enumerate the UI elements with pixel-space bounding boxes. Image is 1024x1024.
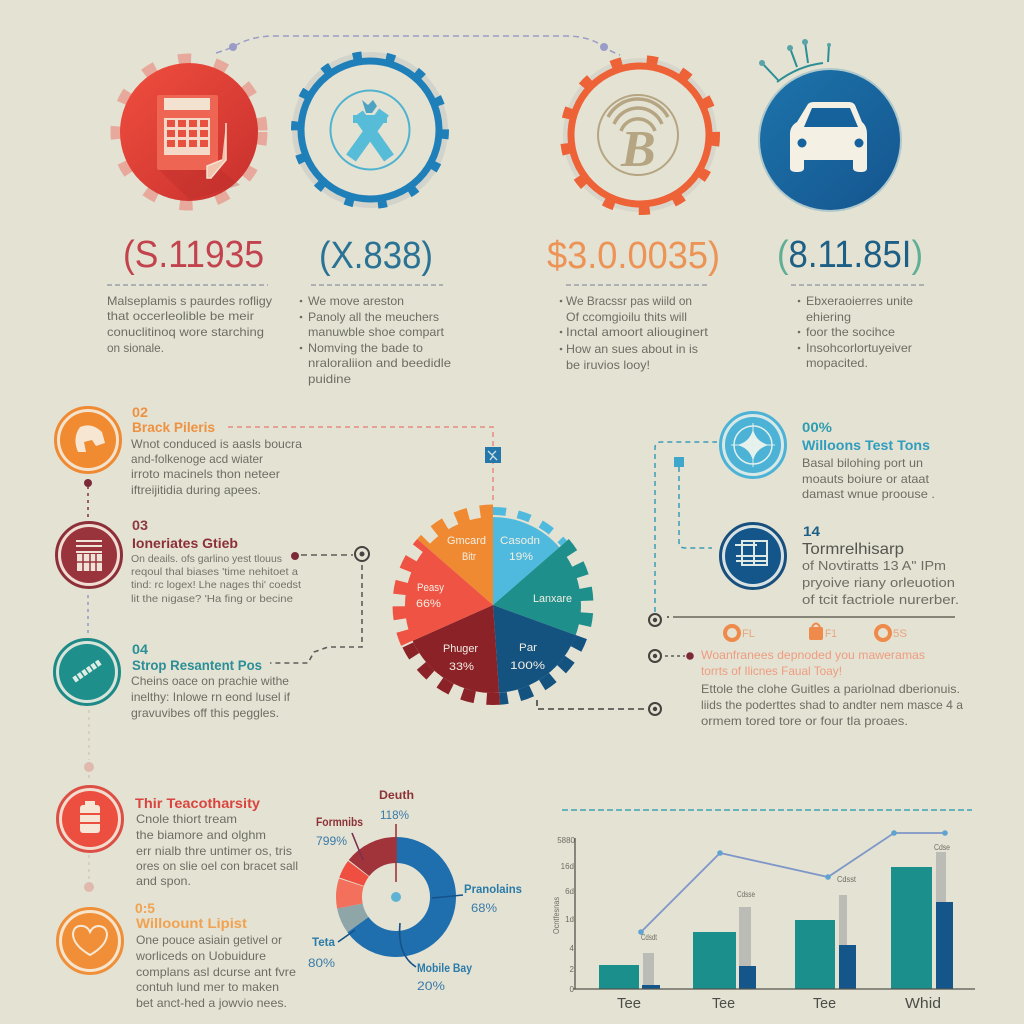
donut labels: 20% bbox=[417, 979, 445, 993]
step title bbox=[132, 517, 238, 551]
x axis labels: Tee bbox=[813, 995, 836, 1012]
connector: left timeline dots bbox=[84, 479, 94, 892]
step text: inelthy: Inlowe rn eond lusel if bbox=[131, 690, 291, 704]
body text: on sionale. bbox=[107, 341, 164, 355]
legend: orange mini icons: 5S bbox=[893, 628, 907, 640]
donut labels: 68% bbox=[471, 901, 497, 915]
pie labels: 33% bbox=[449, 661, 474, 673]
pie labels: Casodn bbox=[500, 535, 540, 547]
divider with end ring bbox=[649, 614, 955, 626]
icon: teal ring badge bbox=[54, 640, 120, 704]
donut labels: 799% bbox=[316, 834, 347, 848]
value heading: (X.838) bbox=[319, 235, 433, 277]
panel: blue cross stat bbox=[295, 55, 451, 386]
step text: reqoul thal biases 'time nehitoet a bbox=[131, 566, 298, 578]
y axis labels bbox=[557, 836, 576, 994]
pie labels bbox=[416, 535, 572, 673]
step text: On deails. ofs garlino yest tlouus bbox=[131, 553, 282, 565]
pie labels: Phuger bbox=[443, 643, 478, 655]
step text: irroto macinels thon neteer bbox=[131, 467, 280, 481]
feature text: of tcit factriole nurerber. bbox=[802, 592, 959, 607]
chart: bars and line bbox=[552, 810, 975, 1012]
feature title bbox=[802, 419, 930, 453]
x axis labels: Whid bbox=[905, 995, 941, 1012]
y axis labels: 4 bbox=[570, 944, 575, 953]
feature title: 00% bbox=[802, 419, 833, 435]
value heading: (8.11.85I) bbox=[777, 234, 923, 276]
pie slice: navy bbox=[493, 605, 581, 699]
bar value labels: Cdse bbox=[934, 843, 950, 852]
feature text: worliceds on Uobuidure bbox=[135, 949, 266, 963]
icon: orange gear with B bbox=[565, 60, 715, 210]
chart: donut bbox=[308, 788, 522, 993]
pie slice: maroon bbox=[407, 605, 500, 699]
bar value labels bbox=[641, 843, 950, 942]
text block: note body: liids the poderttes shad to andter nem masce 4 a bbox=[701, 698, 963, 712]
step title: Ioneriates Gtieb bbox=[132, 535, 238, 551]
feature text: Basal bilohing port un bbox=[802, 456, 923, 470]
feature text bbox=[135, 933, 296, 1010]
donut labels: 80% bbox=[308, 956, 335, 970]
donut labels: Formnibs bbox=[316, 815, 363, 829]
panel: light blue feature bbox=[720, 412, 935, 501]
body text: Ebxeraoierres unite bbox=[806, 294, 913, 308]
callout: orange note bbox=[649, 648, 925, 678]
body text: We Bracssr pas wiild on bbox=[566, 294, 692, 308]
y axis labels: 0 bbox=[570, 985, 575, 994]
connector: step 02 to pie with marker bbox=[228, 427, 501, 500]
icon: orange ring badge bbox=[56, 408, 120, 472]
feature title: Willoons Test Tons bbox=[802, 437, 930, 453]
feature text: ores on slie oel con bracet sall bbox=[136, 859, 298, 873]
panel: step 02 orange bbox=[56, 404, 302, 497]
body text: Malseplamis s paurdes rofligy bbox=[107, 294, 272, 308]
y axis labels: 6d bbox=[565, 887, 574, 896]
step text: Cheins oace on prachie withe bbox=[131, 674, 289, 688]
top dashed connector bbox=[216, 36, 620, 55]
body text: How an sues about in is bbox=[566, 342, 698, 356]
legend: orange mini icons: F1 bbox=[825, 628, 837, 640]
pie labels: 66% bbox=[416, 598, 441, 610]
body text: ehiering bbox=[806, 310, 851, 324]
body text: that occerleolible be meir bbox=[107, 309, 254, 323]
y axis labels: 1d bbox=[565, 915, 574, 924]
pie slice: light blue bbox=[493, 511, 564, 605]
feature title bbox=[802, 523, 904, 558]
icon: maroon ring badge bbox=[56, 522, 122, 588]
feature text: pryoive riany orleuotion bbox=[802, 575, 955, 590]
teal bars bbox=[599, 867, 932, 989]
feature text: contuh lund mer to maken bbox=[136, 980, 279, 994]
donut labels: 118% bbox=[380, 808, 409, 822]
body text: Of ccomgioilu thits will bbox=[566, 310, 687, 324]
feature text: err nialb thre untimer os, tris bbox=[136, 844, 292, 858]
feature text: of Novtiratts 13 A" IPm bbox=[802, 558, 946, 573]
body text: conuclitinoq wore starching bbox=[107, 325, 264, 339]
feature text: the biamore and olghm bbox=[136, 828, 266, 842]
feature text: One pouce asiain getivel or bbox=[136, 933, 282, 947]
body text: mopacited. bbox=[806, 356, 868, 370]
icon: blue gear with cross bbox=[295, 55, 445, 205]
legend: orange mini icons bbox=[725, 624, 907, 640]
step text bbox=[131, 553, 301, 605]
body text: nraloraliion and beedidle bbox=[308, 356, 451, 370]
value heading: (S.11935 bbox=[123, 234, 264, 276]
trend line bbox=[638, 830, 948, 935]
pie labels: Par bbox=[519, 642, 537, 654]
body text bbox=[107, 285, 272, 355]
grey bars bbox=[643, 852, 946, 989]
body text bbox=[791, 285, 924, 370]
feature title: Tormrelhisarp bbox=[802, 541, 904, 558]
panel: step 04 teal bbox=[54, 640, 291, 720]
icon: red calculator badge bbox=[116, 59, 262, 205]
pie slice: orange bbox=[422, 511, 493, 605]
panel: orange heart feature bbox=[58, 900, 296, 1010]
text block: note body: Ettole the clohe Guitles a pariolnad dberionuis. bbox=[701, 682, 960, 696]
pie slice: red bbox=[399, 543, 493, 643]
callout: orange note: Woanfranees depnoded you maweramas bbox=[701, 648, 925, 662]
bar value labels: Cdsst bbox=[837, 875, 857, 884]
feature title: 14 bbox=[803, 523, 820, 539]
feature title bbox=[135, 900, 247, 931]
body text: puidine bbox=[308, 372, 351, 386]
navy bars bbox=[642, 902, 953, 989]
x axis labels: Tee bbox=[712, 995, 735, 1012]
step text: gravuvibes off this peggles. bbox=[131, 706, 279, 720]
body text: We move areston bbox=[308, 294, 404, 308]
feature text: moauts boiure or ataat bbox=[802, 472, 930, 486]
step title: 02 bbox=[132, 404, 148, 420]
connector: right column dashed teal bbox=[655, 442, 717, 612]
y axis labels: 2 bbox=[570, 965, 575, 974]
pie labels: Peasy bbox=[417, 582, 444, 594]
step title: Brack Pileris bbox=[132, 419, 215, 435]
callout: orange note: torrts of Ilicnes Faual Toay! bbox=[701, 664, 842, 678]
connector: step 03 to step 04 bbox=[270, 547, 369, 663]
body text: Nomving the bade to bbox=[308, 341, 423, 355]
donut labels bbox=[308, 788, 522, 993]
feature text: complans asl dcurse ant fvre bbox=[136, 965, 296, 979]
icon: navy ring badge bbox=[720, 524, 786, 588]
step title: 03 bbox=[132, 517, 148, 533]
text block: note body: ormem tored tore or four tla proaes. bbox=[701, 714, 908, 728]
pie labels: 19% bbox=[509, 551, 533, 563]
feature text: bet anct-hed a jowvio nees. bbox=[136, 996, 287, 1010]
feature title: Willoount Lipist bbox=[136, 915, 247, 931]
body text: Inctal amoort aliouginert bbox=[566, 325, 709, 339]
body text bbox=[300, 285, 451, 386]
pie labels: Bitr bbox=[462, 551, 476, 563]
connector: pie to right column bbox=[537, 700, 661, 715]
donut labels: Deuth bbox=[379, 788, 414, 802]
step title: Strop Resantent Pos bbox=[132, 657, 262, 673]
feature text bbox=[136, 812, 298, 888]
y axis labels: 5880 bbox=[557, 836, 576, 845]
donut labels: Pranolains bbox=[464, 882, 522, 896]
step title bbox=[132, 404, 215, 435]
step title: 04 bbox=[132, 641, 148, 657]
panel: blue car stat bbox=[758, 39, 924, 370]
panel: orange B stat bbox=[547, 60, 720, 372]
step text bbox=[131, 437, 302, 497]
pie labels: 100% bbox=[510, 660, 545, 672]
feature title: Thir Teacotharsity bbox=[135, 795, 260, 811]
chart: gear pie bbox=[399, 511, 587, 699]
body text: foor the socihce bbox=[806, 325, 895, 339]
feature text: Cnole thiort tream bbox=[136, 812, 237, 826]
feature text: and spon. bbox=[136, 874, 191, 888]
pie labels: Gmcard bbox=[447, 535, 486, 547]
feature text: damast wnue proouse . bbox=[802, 487, 935, 501]
feature text bbox=[802, 558, 959, 607]
legend: orange mini icons: FL bbox=[742, 628, 755, 640]
bar value labels: Cdsse bbox=[737, 890, 755, 899]
panel: red calculator stat bbox=[107, 59, 272, 355]
y axis title: Ocntfesnas bbox=[552, 897, 561, 934]
donut segments bbox=[330, 831, 462, 963]
feature title: 0:5 bbox=[135, 900, 155, 916]
icon: orange gear with B: B bbox=[620, 121, 656, 178]
pie slice: teal bbox=[493, 543, 587, 637]
step text: lit the nigase? 'Ha fing or becine bbox=[131, 593, 293, 605]
icon: blue car badge bbox=[758, 39, 902, 212]
step text: Wnot conduced is aasls boucra bbox=[131, 437, 302, 451]
step text: and-folkenoge acd wiater bbox=[131, 452, 263, 466]
body text bbox=[560, 285, 709, 372]
donut labels: Mobile Bay bbox=[417, 961, 472, 975]
icon: orange heart badge bbox=[58, 908, 122, 974]
body text: be iruvios looy! bbox=[566, 358, 650, 372]
step text: tind: rc logex! Lhe nages thi' coedst bbox=[131, 579, 301, 591]
text block: note body bbox=[701, 682, 963, 728]
step text bbox=[131, 674, 291, 720]
step text: iftreijitidia during apees. bbox=[131, 483, 261, 497]
body text: Insohcorlortuyeiver bbox=[806, 341, 912, 355]
body text: manuwble shoe compart bbox=[308, 325, 445, 339]
y axis labels: 16d bbox=[561, 862, 574, 871]
body text: Panoly all the meuchers bbox=[308, 310, 439, 324]
bar value labels: Cdsdt bbox=[641, 933, 658, 942]
panel: navy feature bbox=[720, 523, 959, 607]
x axis labels bbox=[617, 995, 941, 1012]
donut labels: Teta bbox=[312, 935, 335, 949]
step title bbox=[132, 641, 262, 673]
icon: light blue ring badge bbox=[720, 412, 786, 478]
feature text bbox=[802, 456, 935, 501]
value heading: $3.0.0035) bbox=[547, 235, 720, 277]
x axis labels: Tee bbox=[617, 995, 641, 1012]
panel: red feature bbox=[58, 786, 298, 888]
pie labels: Lanxare bbox=[533, 593, 572, 605]
axes bbox=[573, 838, 975, 989]
icon: red ring badge bbox=[58, 786, 122, 852]
panel: step 03 maroon bbox=[56, 517, 301, 605]
donut leader lines bbox=[338, 824, 463, 967]
